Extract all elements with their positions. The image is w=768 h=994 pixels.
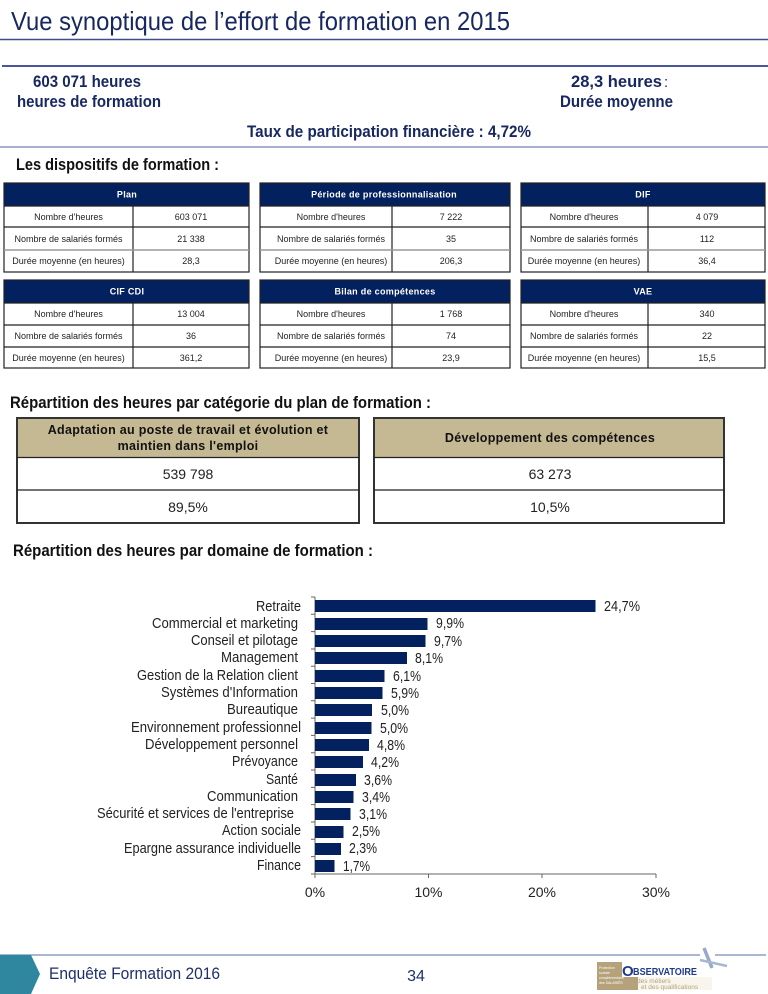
panel: CIF CDI table: [4, 280, 249, 368]
panel: Adaptation table: maintien dans l'emploi: [118, 439, 258, 453]
key figure: average duration: [560, 73, 673, 111]
page number: 34: [407, 968, 425, 985]
panel: VAE table: 15,5: [698, 353, 716, 363]
heading: dispositifs: Les dispositifs de formation :: [16, 155, 219, 174]
category labels: [97, 598, 301, 874]
value labels: 6,1%: [393, 668, 421, 685]
panel: Plan table: Nombre d'heures: [34, 212, 103, 222]
panel: Bilan de compétences table: Bilan de compétences: [334, 286, 436, 296]
value labels: 3,6%: [364, 772, 392, 789]
panel: VAE table: 340: [699, 309, 715, 319]
panel: Adaptation table: Adaptation au poste de travail et évolution et: [48, 423, 329, 437]
panel: VAE table: Durée moyenne (en heures): [528, 353, 640, 363]
logo: Observatoire: O: [622, 963, 634, 980]
panel: CIF CDI table: 36: [186, 331, 196, 341]
category labels: Conseil et pilotage: [191, 632, 298, 649]
category labels: Retraite: [256, 598, 301, 615]
heading: domaine: Répartition des heures par domaine de formation :: [13, 541, 373, 560]
category labels: Management: [221, 649, 299, 666]
logo: Observatoire: complémentaire: [599, 976, 624, 980]
panel: Développement des compétences table: 10,5%: [530, 499, 570, 515]
panel: CIF CDI table: Nombre d'heures: [34, 309, 103, 319]
value labels: 9,7%: [434, 633, 462, 650]
panel: Période de professionnalisation table: Période de professionnalisation: [311, 190, 457, 200]
panel: Plan table: Plan: [117, 190, 137, 200]
axes: [311, 597, 656, 878]
category labels: Prévoyance: [232, 753, 298, 770]
key figure: total hours: 603 071 heures: [33, 73, 141, 91]
logo: Observatoire: BSERVATOIRE: [633, 967, 697, 978]
panel: Bilan de compétences table: 74: [446, 331, 456, 341]
logo: Observatoire: des SALARIÉS: [599, 980, 623, 985]
panel: CIF CDI table: 13 004: [177, 309, 205, 319]
panel: DIF table: DIF: [635, 190, 651, 200]
category labels: Gestion de la Relation client: [137, 667, 299, 684]
title: Vue synoptique de l’effort de formation en 2015: [11, 6, 510, 36]
key figure: average duration: 28,3 heures: [571, 73, 662, 91]
panel: CIF CDI table: Durée moyenne (en heures): [12, 353, 125, 363]
panel: VAE table: VAE: [634, 286, 652, 296]
category labels: Développement personnel: [145, 736, 298, 753]
panel: DIF table: [521, 183, 765, 272]
x axis labels: 10%: [414, 884, 443, 900]
key figure: financial participation rate: Taux de participation financière : 4,72%: [247, 123, 531, 141]
panel: DIF table: Nombre d'heures: [550, 212, 619, 222]
panel: Bilan de compétences table: [260, 280, 510, 368]
panel: Bilan de compétences table: Durée moyenne (en heures): [275, 353, 387, 363]
key figure: total hours: heures de formation: [17, 93, 161, 111]
panel: Période de professionnalisation table: Nombre d'heures: [297, 212, 366, 222]
bars: [315, 600, 596, 872]
panel: Période de professionnalisation table: Nombre de salariés formés: [277, 234, 386, 244]
panel: VAE table: Nombre d'heures: [550, 309, 619, 319]
panel: Développement des compétences table: 63 273: [529, 466, 572, 482]
value labels: 24,7%: [604, 598, 640, 615]
key figure: total hours: [17, 73, 161, 111]
panel: Plan table: [4, 183, 249, 272]
category labels: Systèmes d'Information: [161, 684, 298, 701]
category labels: Communication: [207, 788, 298, 805]
value labels: 1,7%: [343, 858, 370, 875]
panel: VAE table: [521, 280, 765, 368]
x axis labels: 20%: [528, 884, 556, 900]
value labels: 5,0%: [381, 702, 409, 719]
panel: Adaptation table: 89,5%: [168, 499, 208, 515]
bar chart: domaines de formation: [97, 597, 670, 900]
category labels: Bureautique: [227, 701, 298, 718]
panel: Adaptation table: [17, 418, 359, 523]
category labels: Santé: [266, 771, 298, 788]
category labels: Action sociale: [222, 822, 301, 839]
icon: teal footer tab: [0, 955, 40, 994]
logo: Observatoire: sociale: [599, 971, 610, 975]
category labels: Sécurité et services de l'entreprise: [97, 805, 294, 822]
logo: Observatoire: des métiers: [637, 978, 671, 985]
heading: catégorie: Répartition des heures par catégorie du plan de formation :: [10, 393, 431, 412]
panel: Période de professionnalisation table: Durée moyenne (en heures): [275, 256, 387, 266]
logo: Observatoire: et des qualifications: [641, 984, 699, 991]
panel: Plan table: Nombre de salariés formés: [14, 234, 123, 244]
panel: Plan table: 603 071: [175, 212, 207, 222]
panel: Période de professionnalisation table: 206,3: [440, 256, 462, 266]
panel: Développement des compétences table: [374, 418, 724, 523]
panel: Bilan de compétences table: Nombre de salariés formés: [277, 331, 386, 341]
logo: Observatoire: Protection: [599, 966, 615, 970]
panel: Adaptation table: 539 798: [163, 466, 214, 482]
value labels: [343, 598, 640, 875]
panel: Période de professionnalisation table: 7 222: [440, 212, 462, 222]
value labels: 3,1%: [359, 806, 387, 823]
x axis labels: 30%: [642, 884, 670, 900]
panel: Période de professionnalisation table: [260, 183, 510, 272]
footer text: Enquête Formation 2016: [49, 964, 220, 983]
value labels: 2,3%: [349, 840, 377, 857]
category labels: Environnement professionnel: [131, 719, 301, 736]
panel: Bilan de compétences table: 1 768: [440, 309, 462, 319]
panel: DIF table: 112: [700, 234, 714, 244]
panel: CIF CDI table: 361,2: [180, 353, 202, 363]
panel: VAE table: Nombre de salariés formés: [530, 331, 639, 341]
panel: Plan table: Durée moyenne (en heures): [12, 256, 125, 266]
key figure: average duration: Durée moyenne: [560, 93, 673, 111]
category labels: Commercial et marketing: [152, 615, 298, 632]
x axis labels: 0%: [305, 884, 325, 900]
value labels: 4,8%: [377, 737, 405, 754]
panel: Développement des compétences table: Développement des compétences: [445, 431, 655, 445]
panel: Bilan de compétences table: 23,9: [442, 353, 460, 363]
category labels: Epargne assurance individuelle: [124, 840, 301, 857]
panel: Bilan de compétences table: Nombre d'heures: [297, 309, 366, 319]
value labels: 3,4%: [362, 789, 390, 806]
key figure: average duration: :: [664, 74, 668, 91]
value labels: 2,5%: [352, 823, 380, 840]
value labels: 4,2%: [371, 754, 399, 771]
panel: Plan table: 21 338: [177, 234, 205, 244]
panel: VAE table: 22: [702, 331, 712, 341]
panel: Plan table: 28,3: [182, 256, 200, 266]
value labels: 5,0%: [380, 720, 408, 737]
panel: Période de professionnalisation table: 35: [446, 234, 456, 244]
panel: CIF CDI table: CIF CDI: [110, 286, 144, 296]
panel: DIF table: Durée moyenne (en heures): [528, 256, 640, 266]
logo: Observatoire: [597, 948, 727, 991]
panel: DIF table: 36,4: [698, 256, 716, 266]
value labels: 8,1%: [415, 650, 443, 667]
panel: CIF CDI table: Nombre de salariés formés: [14, 331, 123, 341]
category labels: Finance: [257, 857, 301, 874]
panel: DIF table: Nombre de salariés formés: [530, 234, 639, 244]
panel: DIF table: 4 079: [696, 212, 718, 222]
x axis labels: [305, 884, 670, 900]
value labels: 9,9%: [436, 615, 464, 632]
value labels: 5,9%: [391, 685, 419, 702]
